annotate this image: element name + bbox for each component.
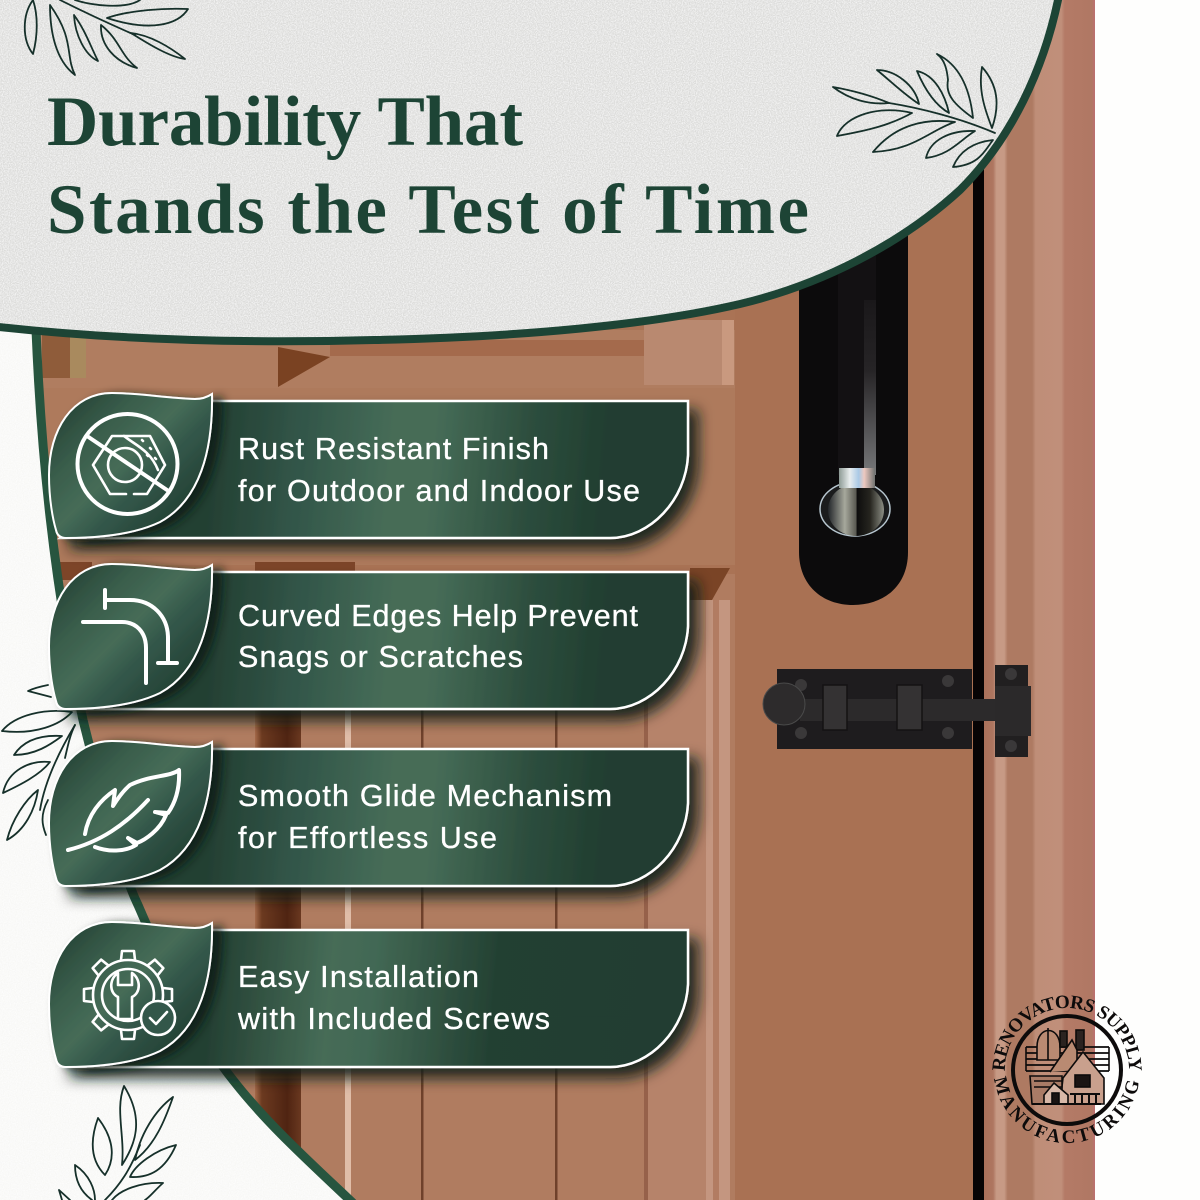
text: curved edges [238, 599, 639, 674]
text: smooth glide: for Effortless Use [238, 821, 497, 855]
door frame [973, 0, 1095, 1200]
icon: gear with wrench and check [84, 951, 175, 1039]
icon: feather [68, 770, 179, 851]
text: smooth glide: Smooth Glide Mechanism [238, 779, 612, 813]
text: rust resistant [238, 432, 640, 508]
leaf sprig: top right [833, 54, 997, 167]
title [47, 83, 809, 249]
text: curved edges: Snags or Scratches [238, 640, 523, 674]
house drawing [1026, 1028, 1109, 1104]
text: easy installation: Easy Installation [238, 960, 479, 994]
icon: curved pipe [83, 590, 177, 683]
leaf sprig: top left [25, 0, 188, 75]
text: smooth glide [238, 779, 612, 855]
leaf sprig: bottom [59, 1086, 176, 1200]
title: Durability That [47, 83, 523, 161]
title: Stands the Test of Time [47, 171, 809, 249]
logo: Renovators Supply Manufacturing: RENOVATORS SUPPLY [992, 996, 1142, 1071]
leaf sprig: left middle [2, 685, 75, 840]
text: easy installation [237, 960, 550, 1036]
door handle [799, 220, 908, 605]
logo: Renovators Supply Manufacturing [992, 996, 1142, 1144]
white left background with green curved edge [0, 325, 355, 1200]
text: curved edges: Curved Edges Help Prevent [238, 599, 639, 633]
card 2: curved edges [49, 564, 688, 709]
text: easy installation: with Included Screws [237, 1002, 550, 1036]
text: rust resistant: Rust Resistant Finish [238, 432, 549, 466]
card 3: smooth glide [49, 741, 688, 886]
logo: Renovators Supply Manufacturing: MANUFACTURING [994, 1076, 1138, 1144]
header curved panel [0, 0, 1060, 341]
card 1: rust resistant [49, 393, 688, 538]
icon: no rust nut [78, 414, 178, 514]
slide bolt latch [763, 665, 1031, 757]
text: rust resistant: for Outdoor and Indoor Use [238, 474, 640, 508]
card 4: easy installation [49, 922, 688, 1067]
